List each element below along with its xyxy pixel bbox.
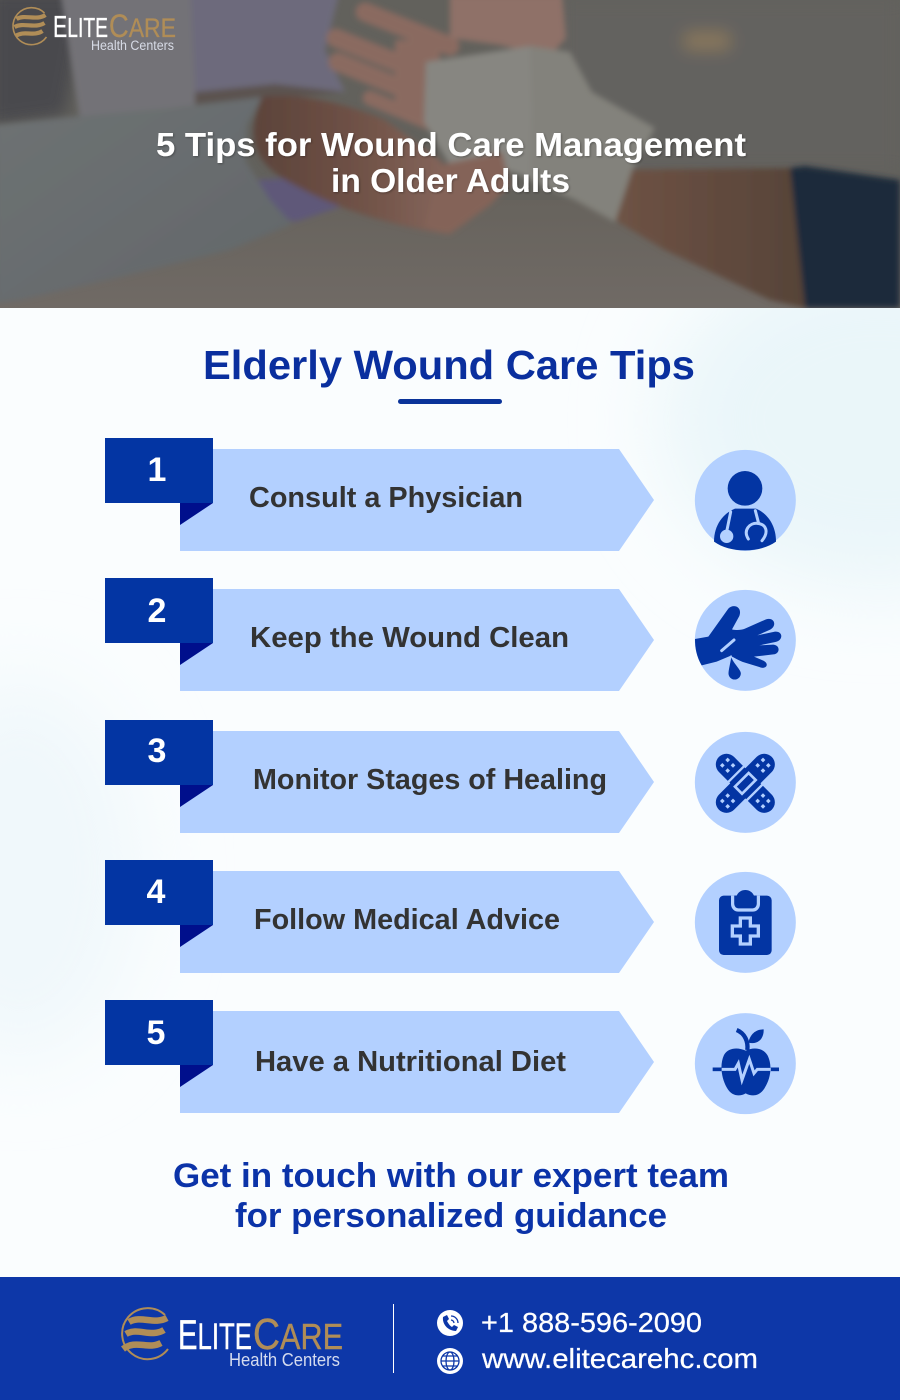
logo: Elite Care top: Health Centers [91,38,174,53]
logo: Elite Care top [13,8,176,53]
tip 3: 3 [148,732,166,770]
coat above sleeve [60,0,200,120]
tip 5: 5 [147,1014,165,1052]
logo: Elite Care footer [122,1308,343,1370]
tip 1: Consult a Physician [249,482,523,514]
bandage [528,46,656,222]
logo: Elite Care footer: ELITE [178,1311,252,1358]
phone number: +1 888-596-2090 [481,1307,702,1338]
tip 2 [105,578,654,691]
doctor's hand [252,94,443,232]
call to action [173,1157,729,1235]
tip 3: Monitor Stages of Healing [253,764,607,796]
hero photo banner [0,0,900,308]
logo: Elite Care footer: Health Centers [229,1349,340,1370]
tip 4: Follow Medical Advice [254,904,560,936]
tip 5 [105,1000,654,1113]
tip 1: 1 [148,451,166,489]
footer band [0,1277,900,1400]
icon: logo emblem footer [122,1308,168,1359]
navy sleeve [790,166,900,308]
icon: logo emblem [13,8,47,45]
lower fingers [442,152,511,224]
tip 5: Have a Nutritional Diet [255,1046,566,1078]
title: in Older Adults [331,162,570,199]
title: 5 Tips for Wound Care Management [156,126,746,163]
tip 2: 2 [148,592,166,630]
tip 4: 4 [147,873,166,911]
call to action: Get in touch with our expert team [173,1157,729,1195]
icon: hand with wound [695,590,796,691]
heading: Elderly Wound Care Tips [203,342,695,388]
logo: Elite Care top: ELITE [53,9,108,44]
tip 2: Keep the Wound Clean [250,622,569,654]
icon: crossed bandages [695,732,796,833]
tip 3 [105,720,654,833]
palm and fingers [336,12,450,122]
icon: globe [437,1348,463,1374]
tip 1 [105,438,654,551]
logo: Elite Care footer: CARE [253,1310,343,1359]
icon: clipboard [695,872,796,973]
coat sleeve [0,97,292,303]
tip 4 [105,860,654,973]
icon: apple with heartbeat [695,1013,796,1114]
lavender under sleeve [255,178,340,222]
icon: phone [437,1310,463,1336]
website: www.elitecarehc.com [481,1343,758,1374]
title [156,126,746,199]
icon: doctor [695,450,796,551]
call to action: for personalized guidance [235,1197,667,1235]
patient arm [610,168,805,308]
logo: Elite Care top: CARE [109,8,176,44]
